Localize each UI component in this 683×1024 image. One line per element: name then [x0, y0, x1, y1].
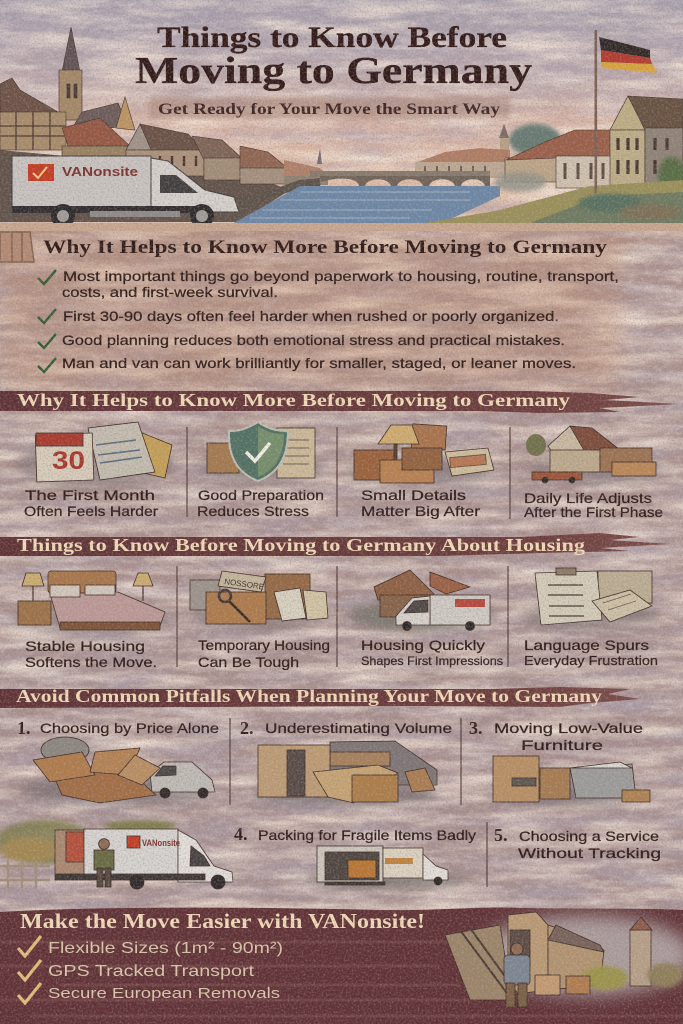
pitfall 5: Choosing a Service: [519, 828, 659, 844]
icon: clipboard and book: [520, 568, 660, 630]
hero panel: [0, 21, 683, 231]
section band: [0, 533, 670, 556]
section band: Things to Know Before Moving to Germany About Housing: [17, 535, 585, 555]
pitfall 5: [494, 825, 661, 861]
title: [135, 21, 532, 92]
pitfall 1: Choosing by Price Alone: [40, 720, 219, 736]
card labels: Language Spurs: [524, 637, 649, 653]
pitfall 1: [17, 718, 219, 804]
pitfall 2: [240, 718, 452, 806]
checklist: Most important things go beyond paperwork to housing, routine, transport,: [63, 268, 619, 284]
pitfall 2: Underestimating Volume: [265, 720, 452, 736]
card labels: Daily Life Adjusts: [524, 490, 652, 506]
pitfall 1: 1.: [17, 718, 30, 738]
checklist: [38, 268, 619, 372]
town left: [0, 27, 330, 222]
van with mover: [0, 820, 233, 889]
icon: furniture stack: [253, 741, 437, 806]
flag: [594, 30, 657, 193]
cta list: GPS Tracked Transport: [48, 963, 255, 980]
pitfall 4: [234, 824, 476, 888]
sky: [0, 0, 683, 226]
dividers: [230, 718, 487, 887]
icon: shield: [198, 422, 322, 484]
section band: [0, 686, 640, 708]
checklist: First 30-90 days often feel harder when rushed or poorly organized.: [63, 308, 559, 324]
checklist: costs, and first-week survival.: [62, 284, 278, 300]
pitfall 2: 2.: [240, 718, 254, 738]
icon: bed: [10, 571, 174, 634]
panel: pitfalls: [0, 686, 661, 889]
cta list: [18, 936, 283, 1003]
icon: house with truck: [526, 426, 663, 483]
card labels: Temporary Housing: [198, 637, 330, 653]
title: Things to Know Before: [157, 21, 507, 54]
pillar decoration: [0, 232, 34, 262]
van with mover: VANonsite: [142, 838, 180, 848]
pitfall 5: Without Tracking: [518, 845, 661, 861]
dividers: [187, 427, 510, 519]
panel: why it helps cards: [0, 390, 680, 520]
card labels: Can Be Tough: [198, 654, 299, 670]
card labels: Housing Quickly: [361, 637, 485, 653]
banner background: [0, 908, 683, 1024]
panel: call to action: [0, 908, 683, 1024]
icon: box with key: NOSSORE: [224, 577, 265, 592]
icon: house with van: [348, 570, 492, 631]
cta list: Secure European Removals: [48, 985, 280, 1002]
cta list: Flexible Sizes (1m² - 90m²): [48, 940, 283, 957]
section band: Avoid Common Pitfalls When Planning Your Move to Germany: [16, 686, 602, 706]
subtitle: Get Ready for Your Move the Smart Way: [158, 101, 500, 118]
icon: calendar and papers: 30: [52, 447, 85, 475]
card labels: Often Feels Harder: [24, 503, 158, 519]
van: VANonsite: [62, 164, 138, 179]
section band: [0, 390, 680, 413]
panel: why it helps intro: [0, 232, 619, 372]
cta heading: Make the Move Easier with VANonsite!: [20, 909, 425, 933]
dividers: [177, 566, 508, 667]
card labels: Matter Big After: [361, 503, 480, 519]
card labels: Softens the Move.: [25, 654, 157, 670]
pitfall 3: [469, 718, 650, 805]
illustration: mover and house: [445, 912, 683, 1007]
icon: cabinet and mattress: [490, 756, 650, 805]
card labels: Stable Housing: [25, 638, 145, 654]
checklist: Man and van can work brilliantly for smaller, staged, or leaner moves.: [62, 355, 576, 371]
pitfall 3: Furniture: [521, 737, 603, 753]
warm wash behind intro panel: [0, 232, 620, 390]
card labels: After the First Phase: [524, 504, 663, 520]
pitfall 3: Moving Low-Value: [494, 720, 643, 736]
icon: open truck: [305, 846, 465, 888]
panel: housing: [0, 533, 670, 670]
icon: calendar and papers: [15, 422, 175, 487]
card labels: The First Month: [25, 487, 155, 503]
subtitle band: [150, 97, 510, 119]
town right: [415, 96, 683, 193]
card labels: [25, 637, 658, 670]
pitfall 4: Packing for Fragile Items Badly: [258, 827, 476, 843]
card labels: Shapes First Impressions: [361, 654, 503, 668]
card labels: Everyday Frustration: [524, 653, 658, 668]
icon: lamp and boxes: [348, 424, 494, 486]
section band: Why It Helps to Know More Before Moving to Germany: [17, 390, 570, 410]
bridge: [310, 171, 490, 186]
card labels: Good Preparation: [198, 487, 324, 503]
river: [232, 186, 500, 224]
pitfall 4: 4.: [234, 824, 248, 844]
heading: Why It Helps to Know More Before Moving to Germany: [43, 237, 608, 258]
right bank: [425, 172, 683, 224]
van: [12, 156, 239, 228]
card labels: Reduces Stress: [197, 503, 309, 519]
banner streaks: [0, 942, 683, 1016]
checklist: Good planning reduces both emotional stress and practical mistakes.: [62, 332, 565, 348]
card labels: [24, 487, 663, 520]
pitfall 5: 5.: [494, 825, 508, 845]
title: Moving to Germany: [135, 50, 532, 92]
card labels: Small Details: [361, 487, 466, 503]
icon: messy boxes and car: [20, 737, 215, 804]
ground strip: [0, 223, 683, 231]
pitfall 3: 3.: [469, 718, 482, 738]
icon: box with key: [190, 571, 330, 629]
